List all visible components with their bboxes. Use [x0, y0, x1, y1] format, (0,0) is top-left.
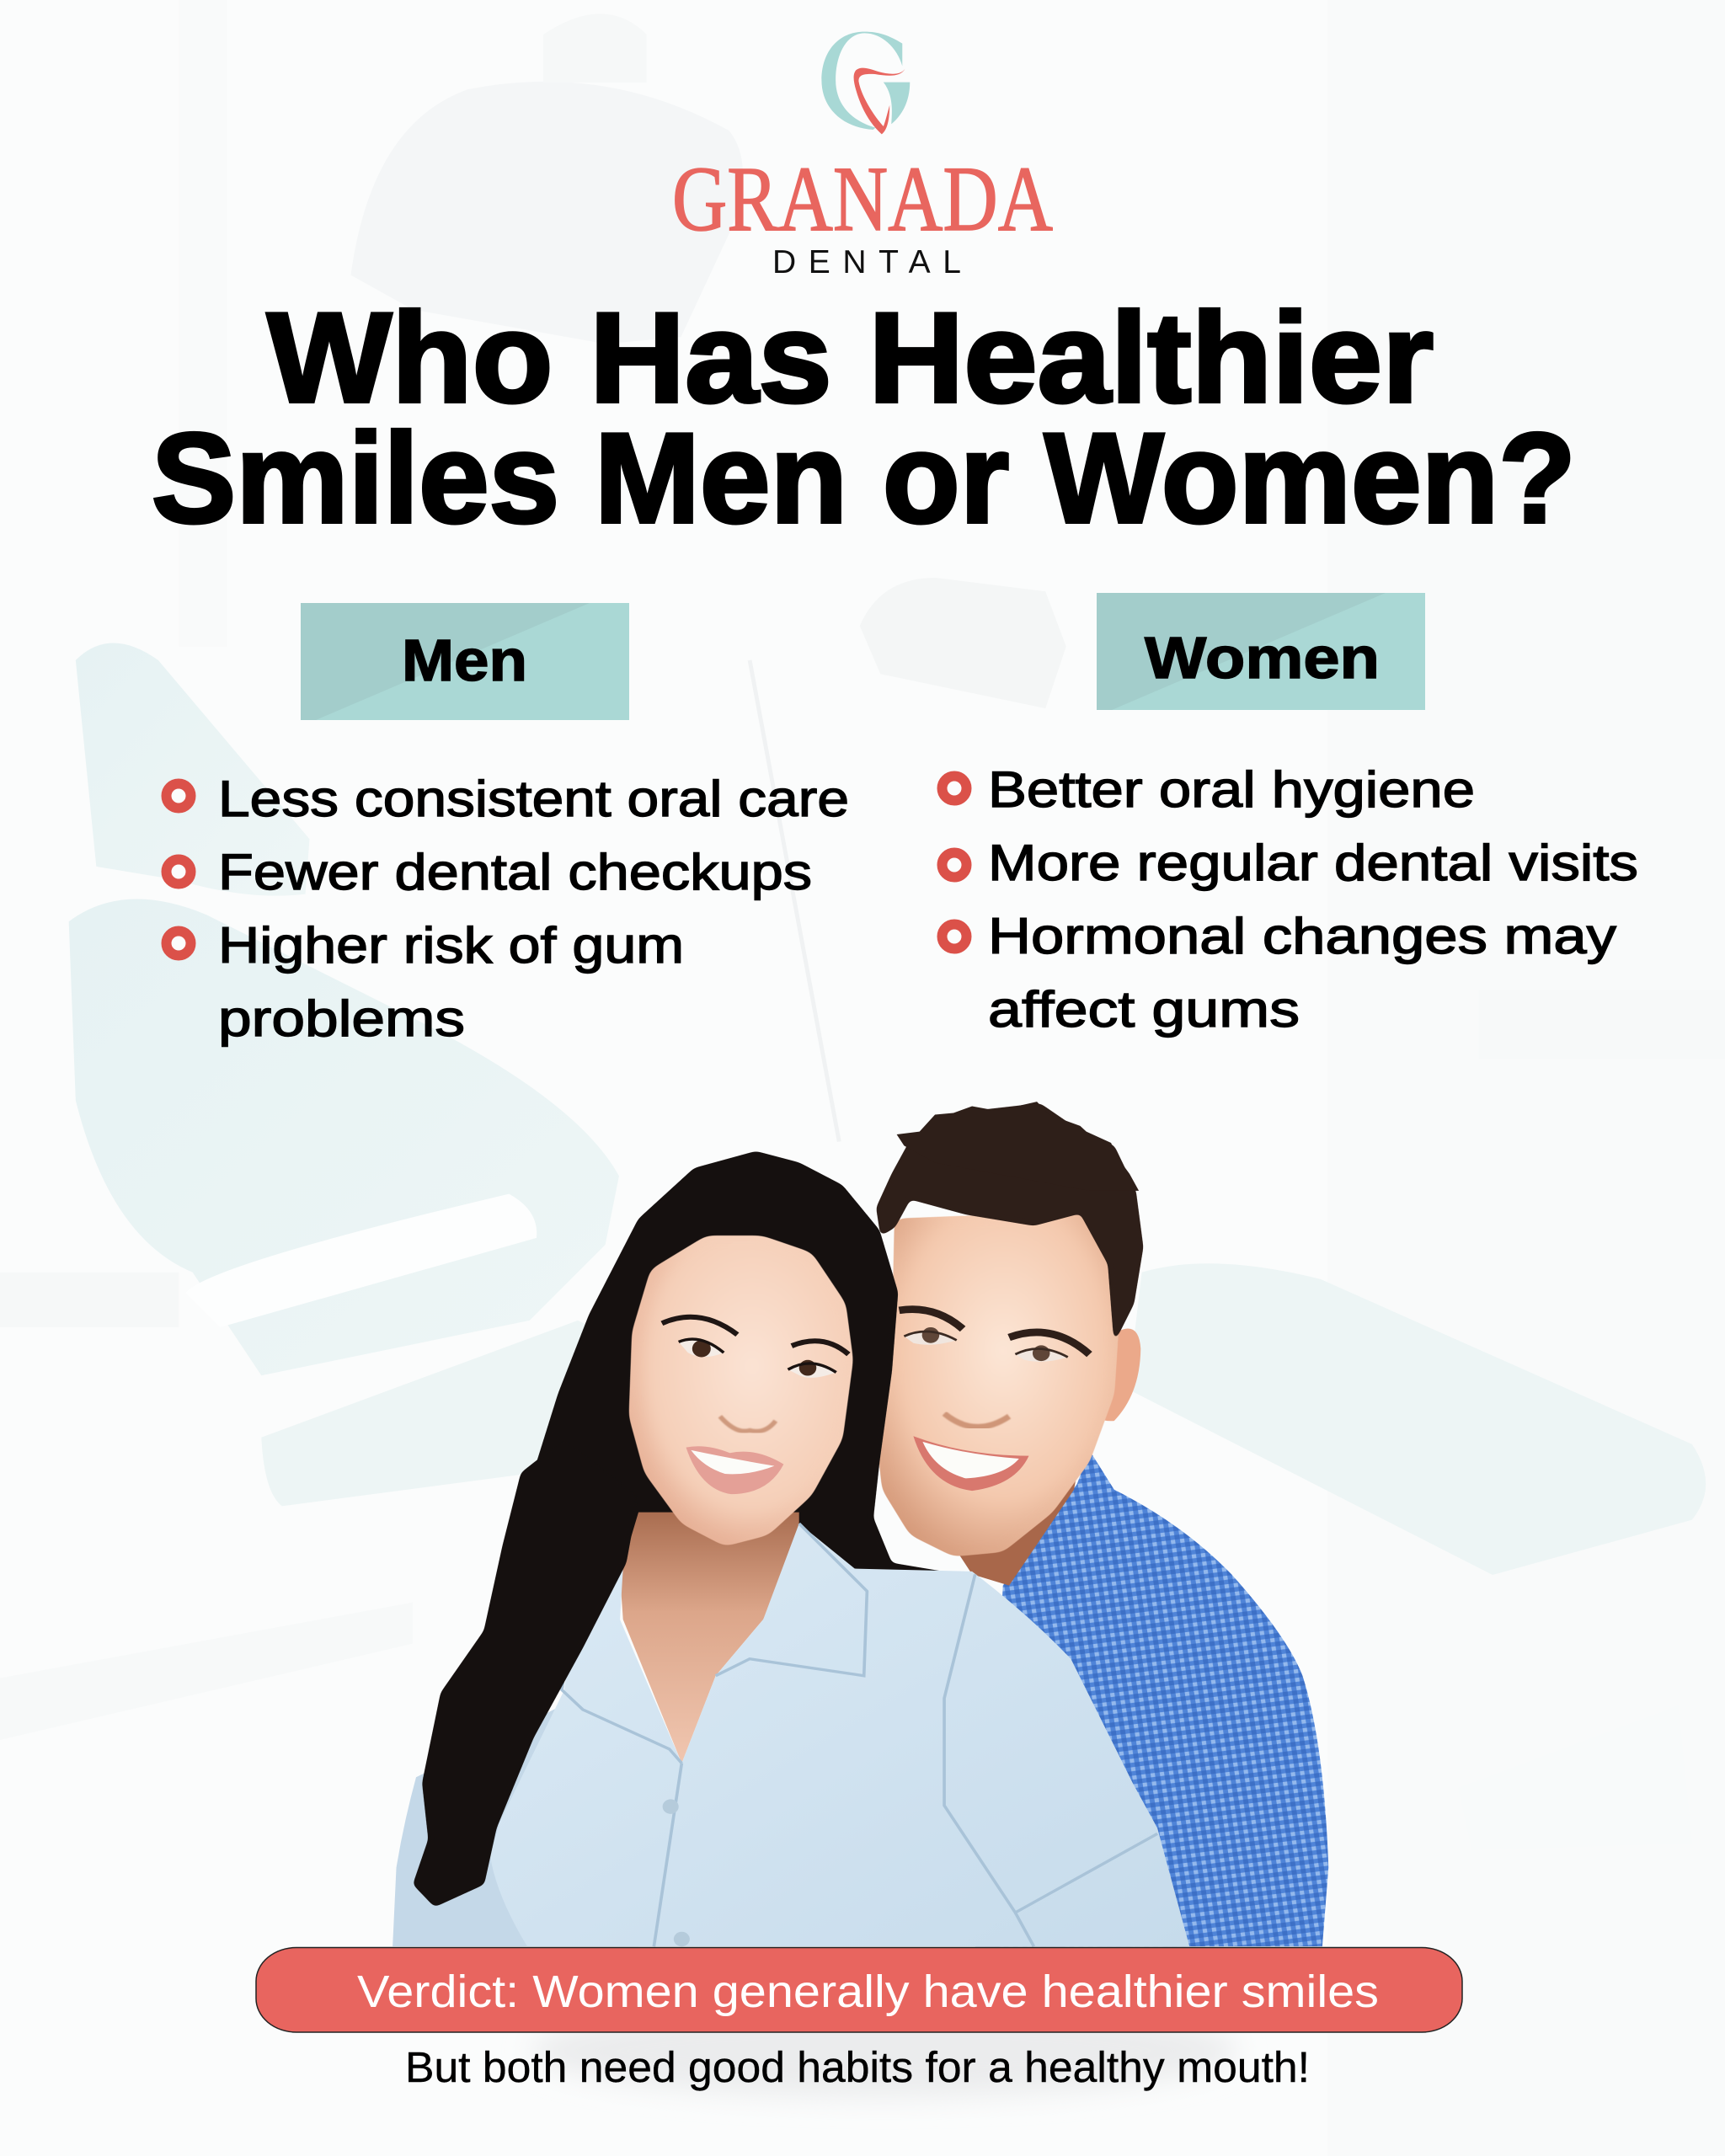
- woman: hair: [533, 1151, 966, 1586]
- men list: Higher risk of gum: [218, 917, 684, 974]
- title: Who Has Healthier: [267, 286, 1434, 430]
- woman: shirt buttons: [663, 1799, 690, 1946]
- woman: collar and seam details: [562, 1524, 1157, 1946]
- man: blue checked shirt: [975, 1450, 1328, 1946]
- woman: far arm: [393, 1699, 638, 1946]
- woman: face: [629, 1235, 853, 1546]
- verdict banner: Verdict: Women generally have healthier smiles: [357, 1967, 1379, 2017]
- women list: More regular dental visits: [988, 835, 1638, 891]
- icon: tooth G mark: [821, 32, 910, 134]
- man: hair: [876, 1102, 1143, 1343]
- women heading: [1097, 593, 1425, 710]
- women list: [988, 761, 1638, 1038]
- woman: brows, eyes and smile: [662, 1317, 848, 1494]
- men list: [218, 771, 849, 1047]
- men list: Less consistent oral care: [218, 771, 849, 827]
- woman: light blue shirt: [490, 1524, 1189, 1946]
- women list: affect gums: [988, 981, 1300, 1038]
- men list: Fewer dental checkups: [218, 844, 812, 900]
- woman: neck: [620, 1513, 799, 1764]
- man: neck: [953, 1473, 1077, 1586]
- women heading: Women: [1145, 625, 1380, 691]
- logo subline: DENTAL: [772, 244, 961, 280]
- panel: women: [942, 593, 1638, 1038]
- women list: Better oral hygiene: [988, 761, 1475, 818]
- men heading: [301, 603, 629, 720]
- men heading: Men: [402, 627, 527, 693]
- men bullets: [167, 783, 190, 955]
- logo wordmark: GRANADA: [672, 147, 1053, 250]
- panel: men: [167, 603, 849, 1047]
- couple photo: [393, 1102, 1328, 1946]
- man: ear: [1096, 1328, 1140, 1421]
- logo: [672, 32, 1053, 280]
- closing note: But both need good habits for a healthy mouth!: [405, 2043, 1310, 2091]
- men list: problems: [218, 990, 465, 1047]
- woman: front hair strand: [413, 1439, 638, 1907]
- verdict banner: [256, 1947, 1462, 2032]
- man: face: [879, 1214, 1119, 1556]
- women bullets: [942, 776, 967, 948]
- title: [152, 286, 1576, 550]
- women list: Hormonal changes may: [988, 908, 1616, 964]
- title: Smiles Men or Women?: [152, 407, 1576, 550]
- man: brows, eyes and smile: [900, 1310, 1089, 1491]
